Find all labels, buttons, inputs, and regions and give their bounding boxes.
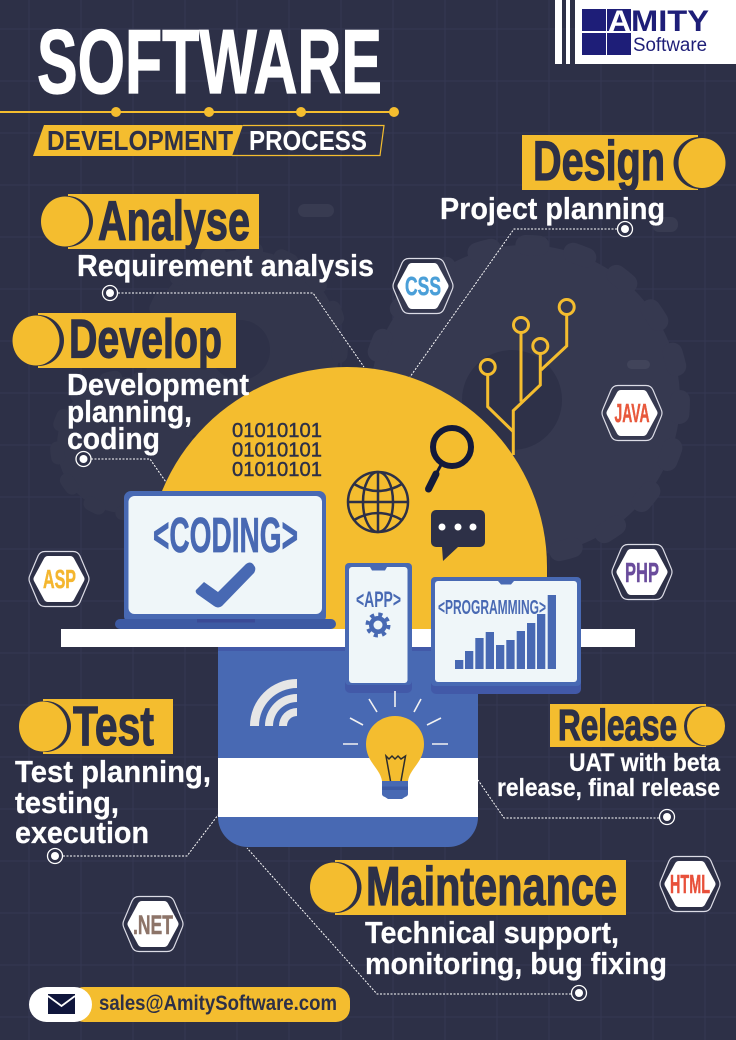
badge: .NET [123, 896, 183, 952]
test heading band: Test [73, 694, 154, 757]
logo: Amity Software: A [608, 5, 631, 38]
icon: envelope [48, 994, 75, 1014]
step: release [497, 701, 725, 824]
yellow semicircle [147, 367, 547, 630]
maintenance heading band: Maintenance [366, 855, 617, 917]
subtitle banner [33, 125, 384, 156]
develop description: planning, [67, 394, 192, 429]
design heading band: Design [533, 129, 665, 192]
binary code: 01010101 [232, 420, 322, 442]
develop description: Development [67, 367, 249, 402]
maintenance connector dot [572, 986, 586, 1000]
test description [15, 754, 211, 850]
develop description: coding [67, 421, 160, 456]
badge: .NET: .NET [133, 910, 173, 940]
maintenance heading band [310, 855, 626, 917]
develop heading band [12, 308, 236, 370]
maintenance description [365, 915, 667, 981]
step: design [440, 129, 726, 236]
release description: UAT with beta [569, 749, 721, 777]
title divider with dots [0, 107, 399, 117]
logo: Amity Software: MITY [631, 5, 709, 38]
test description: Test planning, [15, 754, 211, 789]
contact pill: sales@AmitySoftware.com [99, 992, 337, 1015]
analyse connector dot [102, 286, 118, 300]
logo: Amity Software: Software [633, 35, 707, 56]
analyse heading band: Analyse [98, 189, 250, 252]
icon: chat bubble [431, 510, 485, 561]
badge: CSS: CSS [405, 271, 441, 301]
test connector dot [48, 848, 62, 864]
release description [497, 749, 721, 802]
binary code [232, 420, 322, 481]
icon: globe [348, 472, 408, 532]
develop heading band: Develop [69, 308, 222, 370]
blue base panel [218, 645, 478, 847]
badge: JAVA [602, 386, 662, 440]
test heading band [19, 694, 173, 757]
analyse heading band [41, 189, 259, 252]
laptop: coding: <CODING> [153, 509, 298, 563]
logo: Amity Software [555, 0, 736, 64]
maintenance description: monitoring, bug fixing [365, 946, 667, 981]
design connector dot [618, 222, 632, 236]
badge: ASP: ASP [43, 564, 76, 594]
circuit tree [480, 300, 574, 455]
connector lines [63, 229, 659, 994]
subtitle banner: PROCESS [249, 125, 367, 156]
phone: app [345, 563, 412, 693]
subtitle banner: DEVELOPMENT [47, 125, 233, 156]
title: SOFTWARE [37, 12, 382, 113]
step: test [15, 694, 211, 864]
icon: light bulb [343, 691, 448, 799]
step: maintenance [310, 855, 667, 1000]
icon: wifi [250, 679, 297, 726]
binary code: 01010101 [232, 440, 322, 462]
badge: CSS [393, 258, 453, 314]
contact pill [29, 987, 350, 1022]
tablet: programming chart [431, 577, 581, 694]
test description: testing, [15, 785, 119, 820]
develop connector dot [76, 452, 91, 466]
step: analyse [41, 189, 374, 300]
phone: app: <APP> [356, 587, 401, 612]
release description: release, final release [497, 774, 720, 802]
badge: JAVA: JAVA [614, 398, 650, 428]
tablet: programming chart: <PROGRAMMING> [438, 597, 546, 619]
step: develop [12, 308, 249, 466]
design description: Project planning [440, 191, 665, 226]
binary code: 01010101 [232, 459, 322, 481]
badge: PHP: PHP [625, 557, 659, 588]
develop description [67, 367, 249, 456]
badge: ASP [29, 552, 89, 606]
badge: PHP [612, 544, 672, 600]
white shelf [61, 629, 635, 651]
icon: magnifier [428, 428, 471, 489]
background gears [57, 204, 680, 555]
maintenance description: Technical support, [365, 915, 619, 950]
test description: execution [15, 815, 149, 850]
analyse description: Requirement analysis [77, 248, 374, 283]
release connector dot [660, 810, 674, 824]
laptop: coding [115, 491, 336, 629]
release heading band: Release [558, 701, 677, 750]
badge: HTML [660, 856, 720, 912]
